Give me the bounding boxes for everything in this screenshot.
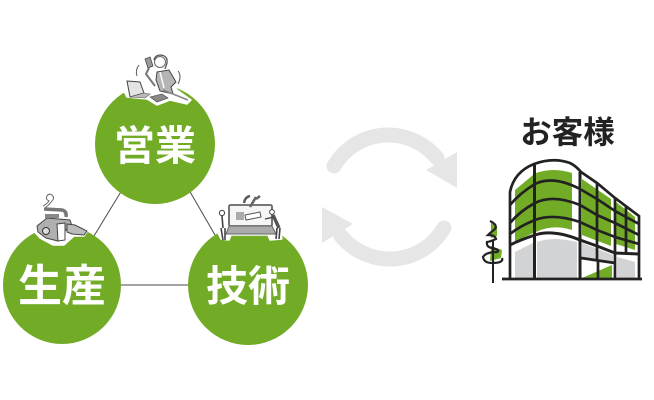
window frame lines bbox=[502, 160, 642, 279]
heading: お客様: お客様 bbox=[520, 114, 615, 150]
icon: engineers with large laptop bbox=[218, 196, 284, 240]
green facade bbox=[515, 175, 533, 242]
tree bbox=[483, 221, 502, 283]
arrows: exchange cycle bbox=[322, 135, 457, 259]
circle: 営業: 営業 bbox=[114, 123, 196, 169]
arrow: top bbox=[334, 135, 457, 188]
circle: 生産: 生産 bbox=[18, 262, 106, 311]
circle: 技術: 技術 bbox=[206, 263, 290, 310]
grey lower floors bbox=[515, 243, 533, 278]
arrow: bottom bbox=[322, 207, 444, 259]
circle: 技術 bbox=[188, 225, 308, 345]
icon: factory machine bbox=[31, 194, 89, 245]
icon: office building bbox=[483, 160, 642, 283]
circle: 生産 bbox=[3, 226, 121, 344]
circle: 営業 bbox=[95, 84, 215, 204]
icon: salesperson at laptop bbox=[120, 55, 191, 105]
triangle connector lines bbox=[94, 190, 215, 285]
